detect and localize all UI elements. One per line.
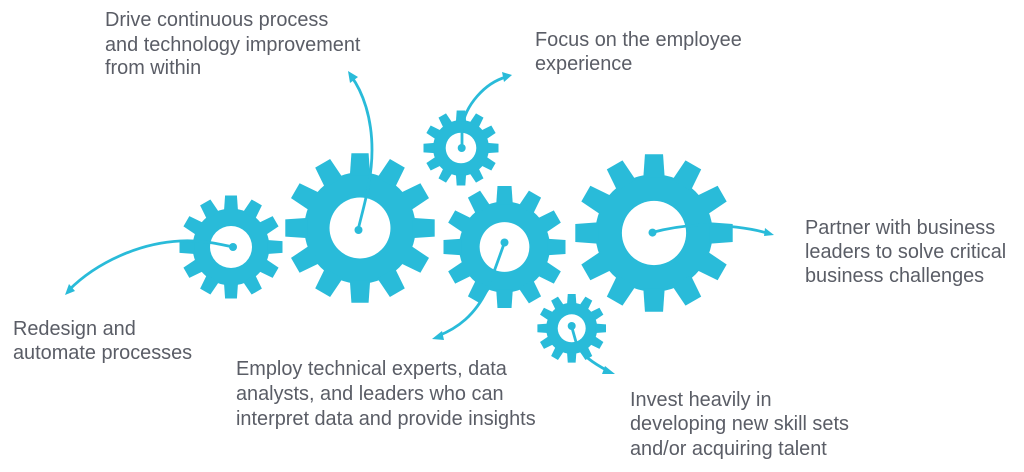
text: redesign and automate: automate processes <box>13 342 192 364</box>
text: invest heavily: Invest heavily in <box>630 389 772 411</box>
text: employ technical experts: interpret data and provide insights <box>236 408 536 430</box>
text: partner with business leaders: leaders to solve critical <box>805 241 1006 263</box>
arrow: process and technology <box>348 71 372 234</box>
arrow: employee experience <box>458 72 512 152</box>
text: drive continuous process: and technology improvement <box>105 34 361 56</box>
text: drive continuous process: Drive continuous process <box>105 9 328 31</box>
arrow: business partners <box>648 225 774 237</box>
text: employ technical experts: analysts, and leaders who can <box>236 383 504 405</box>
gear: business partners <box>575 154 733 312</box>
text: focus on the employee experience: experience <box>535 53 632 75</box>
gear: skill sets and talent <box>537 294 606 363</box>
text: partner with business leaders: business challenges <box>805 265 984 287</box>
arrow: skill sets and talent <box>568 322 615 374</box>
text: employ technical experts: Employ technical experts, data <box>236 358 508 380</box>
text: invest heavily: developing new skill sets <box>630 413 849 435</box>
arrow: technical experts <box>432 238 508 340</box>
gear: employee experience <box>424 110 498 186</box>
gear: technical experts <box>444 186 566 308</box>
text: focus on the employee experience: Focus on the employee <box>535 29 742 51</box>
gear: redesign and automate <box>180 196 282 298</box>
text: drive continuous process: from within <box>105 57 201 79</box>
text: invest heavily: and/or acquiring talent <box>630 438 827 460</box>
gear: process and technology <box>285 153 435 303</box>
text: partner with business leaders: Partner with business <box>805 217 995 239</box>
text: redesign and automate: Redesign and <box>13 318 136 340</box>
arrow: redesign and automate <box>65 241 237 295</box>
